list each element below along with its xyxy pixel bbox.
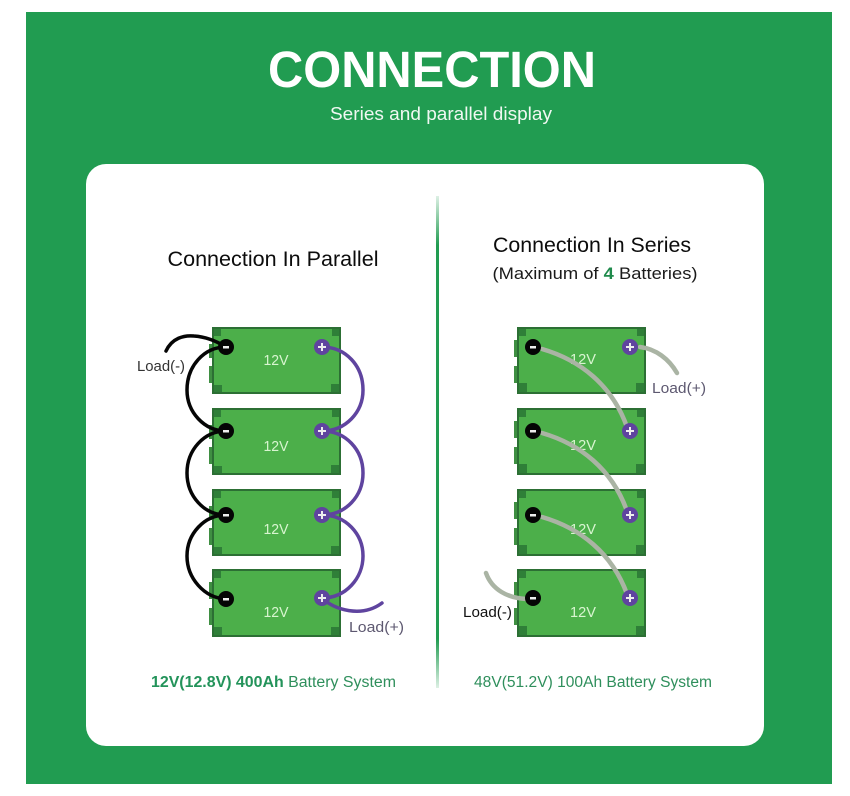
battery 4 [209,570,340,636]
title: CONNECTION [268,41,596,98]
battery 4 [514,570,645,636]
battery 3 [514,490,645,555]
battery 2: 12V [570,437,596,454]
label: load plus: Load(+) [652,380,706,397]
battery 4: 12V [570,604,596,621]
panel: white card [86,164,764,746]
label: load minus: Load(-) [463,604,512,621]
battery 2 [209,409,340,474]
battery 4: 12V [264,604,288,621]
positive terminals [622,339,638,606]
caption: parallel system: 12V(12.8V) 400Ah Battery System [151,674,396,691]
caption: series system: 48V(51.2V) 100Ah Battery System [474,674,712,691]
grey wires [486,347,677,599]
battery 3: 12V [264,521,288,538]
positive terminals [314,339,330,606]
panel: series connection [463,233,712,691]
black negative wires [166,336,226,599]
heading: series: Connection In Series [493,233,691,257]
label: load minus: Load(-) [137,358,185,375]
battery 1 [209,328,340,393]
negative terminals [218,339,234,607]
battery 1: 12V [570,351,596,368]
negative terminals [525,339,541,606]
battery 1: 12V [264,352,288,369]
subtitle: Series and parallel display [330,104,552,124]
subheading: maximum batteries: (Maximum of 4 Batteries) [492,265,698,283]
purple positive wires [322,347,382,611]
heading: parallel: Connection In Parallel [168,247,378,271]
battery 2 [514,409,645,474]
battery 3: 12V [570,521,596,538]
divider [436,196,439,688]
battery 3 [209,490,340,555]
panel: parallel connection [137,247,404,691]
battery 1 [514,328,645,393]
battery 2: 12V [264,438,288,455]
label: load plus: Load(+) [349,619,404,636]
